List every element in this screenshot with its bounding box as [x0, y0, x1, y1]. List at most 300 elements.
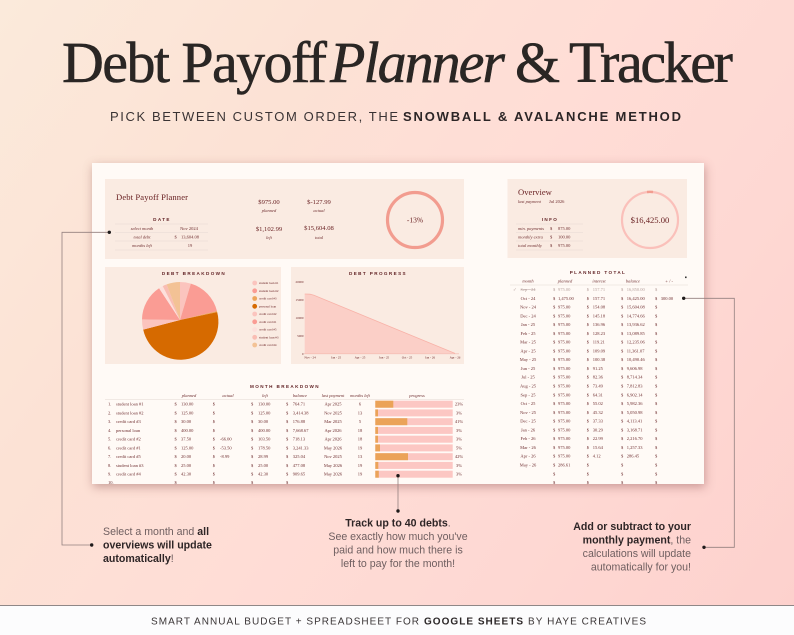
table rows: $ [655, 471, 658, 476]
table rows: 3,414.38 [293, 410, 309, 416]
stat: left [256, 226, 283, 240]
table rows [108, 402, 463, 485]
table rows: $ [587, 357, 590, 362]
table rows: Nov - 24 [520, 304, 537, 310]
table rows: 975.00 [558, 401, 571, 406]
subtitle: SNOWBALL & AVALANCHE METHOD [403, 109, 681, 124]
table rows: $ [213, 480, 216, 485]
table rows: student loan #3 [116, 463, 144, 468]
table rows: 157.71 [593, 296, 605, 301]
pie legend: student loan #2 [259, 289, 279, 293]
table rows: 19 [358, 445, 363, 450]
pie legend: personal loan [259, 304, 276, 308]
table rows: $ [655, 419, 658, 424]
table rows: 19 [358, 472, 363, 477]
table rows: $ [655, 480, 658, 485]
callout: track up to 40 debts: left to pay for the month! [341, 558, 455, 570]
table rows: $ [587, 462, 590, 468]
table rows: $ [655, 331, 658, 336]
table rows: $ [174, 402, 178, 407]
table rows: $ [174, 445, 178, 450]
table rows: 1,257.33 [627, 445, 643, 451]
table rows: 975.00 [558, 427, 571, 432]
stat: left: $1,102.99 [256, 226, 283, 233]
table rows: $ [174, 472, 178, 477]
table rows: $ [587, 331, 590, 336]
table rows: 109.09 [593, 348, 606, 353]
table rows: $ [553, 410, 556, 415]
table rows: $ [251, 480, 254, 485]
table rows: 119.21 [593, 340, 605, 345]
table rows: $ [174, 463, 178, 468]
table rows: $ [553, 471, 556, 476]
table rows: 9. [108, 472, 111, 477]
table rows: 6. [108, 445, 111, 450]
table rows: $ [655, 287, 658, 292]
table rows: 136.96 [593, 322, 606, 327]
table rows: $ [655, 454, 658, 459]
table rows: May 2026 [324, 472, 343, 477]
table rows: Oct - 25 [521, 401, 536, 406]
table rows: $ [621, 445, 624, 450]
table rows: 2. [108, 410, 111, 415]
table rows: 5,982.36 [627, 401, 643, 407]
column headers: interest [592, 278, 606, 283]
table rows: $ [174, 428, 178, 433]
table rows: $ [621, 366, 624, 371]
table rows: 9,606.98 [627, 366, 643, 372]
table rows: 5. [108, 437, 111, 442]
info table: 875.00 [558, 226, 571, 231]
table rows: $ [655, 392, 658, 397]
pie legend [252, 281, 279, 347]
table rows: 4,113.41 [627, 419, 642, 425]
date table [115, 217, 208, 250]
table rows: 130.00 [181, 402, 194, 407]
table rows: $ [174, 437, 178, 442]
table rows: 19 [358, 463, 363, 468]
table rows: $ [655, 410, 658, 415]
table rows: 7,668.67 [293, 428, 309, 434]
table rows: $ [553, 436, 556, 441]
table rows: 5,050.98 [627, 410, 643, 416]
table rows: 286.61 [558, 462, 570, 468]
pie legend: student loan #1 [259, 281, 279, 285]
area chart: 0 [302, 352, 304, 356]
table rows: 909.65 [293, 472, 306, 477]
table rows: Sep - 25 [520, 392, 536, 397]
table rows: $ [553, 419, 556, 424]
progress bars [375, 401, 453, 478]
table rows: 18 [358, 428, 363, 433]
table rows: 6,902.14 [627, 392, 643, 398]
callout: add or subtract: calculations will update [583, 548, 691, 560]
table rows: 30.00 [181, 419, 192, 424]
table rows: $ [251, 472, 254, 477]
table rows: credit card #2 [116, 437, 141, 442]
table rows: $ [655, 296, 658, 301]
table rows: $ [251, 437, 254, 442]
callout: add or subtract [573, 521, 691, 574]
callout: select a month: automatically! [103, 553, 174, 565]
table rows: $ [213, 410, 216, 415]
panel: debt payoff planner summary [105, 179, 464, 259]
area chart: Oct - 25 [402, 356, 413, 360]
date table: Nov 2024 [180, 226, 199, 231]
table rows: 400.00 [181, 428, 194, 433]
table rows: $ [213, 419, 216, 424]
table rows: $ [587, 436, 590, 441]
table rows: 718.13 [293, 437, 306, 442]
table rows: $ [655, 401, 658, 406]
table rows: $ [286, 454, 289, 459]
callout: select a month: overviews will update [103, 540, 212, 552]
table rows: 30.00 [258, 419, 269, 424]
table rows: 157.71 [593, 287, 605, 292]
progress ring: -13% [407, 216, 423, 224]
table rows: personal loan [116, 428, 141, 433]
area chart: Apr - 25 [355, 356, 366, 360]
table rows: Apr - 25 [520, 348, 536, 353]
table rows: $ [621, 322, 624, 327]
date table: 13,604.08 [181, 234, 200, 240]
date table: DATE [153, 217, 171, 222]
column headers: planned [557, 278, 573, 283]
table rows: $ [655, 427, 658, 432]
table rows: Sep - 24 [520, 287, 536, 292]
table rows: 2,216.70 [627, 436, 643, 442]
table rows: 5 [359, 419, 362, 424]
table rows: $ [251, 445, 254, 450]
table rows: $ [655, 322, 658, 327]
panel: debt breakdown [105, 267, 281, 364]
table rows: Mar - 25 [520, 340, 537, 345]
table rows: $ [286, 472, 289, 477]
table rows [513, 287, 674, 485]
table rows: 286.45 [627, 454, 640, 459]
table rows: 7. [108, 454, 111, 459]
column headers: balance [293, 393, 307, 398]
table rows: $ [213, 454, 216, 459]
table rows: 3% [456, 472, 462, 477]
table rows: 145.18 [593, 313, 606, 318]
table rows: credit card #3 [116, 419, 141, 424]
table rows: $ [286, 445, 289, 450]
stat: total: total [315, 235, 324, 240]
table rows: Apr 2026 [324, 428, 342, 433]
table rows: $ [553, 287, 556, 292]
pie legend: student loan #3 [259, 335, 279, 339]
table rows: 975.00 [558, 331, 571, 336]
table rows: Nov 2025 [324, 410, 343, 415]
table rows: $ [553, 480, 556, 485]
table rows: $ [587, 322, 590, 327]
table rows: 975.00 [558, 454, 571, 459]
table rows: 975.00 [558, 436, 571, 441]
callout: add or subtract: Add or subtract to your [573, 521, 691, 533]
table rows: 154.08 [593, 304, 606, 310]
planner heading: Debt Payoff Planner [116, 192, 188, 202]
table rows: 975.00 [558, 313, 571, 318]
table rows: 25.00 [181, 463, 192, 468]
table rows: $ [621, 454, 624, 459]
table rows: $ [621, 419, 624, 424]
callout: add or subtract: automatically for you! [591, 562, 691, 574]
area chart [296, 280, 461, 360]
table rows: 975.00 [558, 419, 571, 424]
table rows: 16,850.00 [627, 287, 645, 293]
table rows: 42% [455, 454, 463, 459]
stat: total: $15,604.08 [304, 225, 335, 232]
table rows: $ [587, 313, 590, 318]
table rows: 764.71 [293, 402, 305, 407]
table rows: 42.30 [258, 472, 269, 477]
table rows: $ [587, 366, 590, 371]
table rows: May - 26 [520, 462, 537, 468]
table rows: $ [655, 313, 658, 318]
table rows: $ [655, 445, 658, 450]
area chart: 20000 [296, 280, 304, 284]
area chart: Jan - 26 [425, 356, 435, 360]
table rows: credit card #1 [116, 445, 141, 450]
connector: progress bars to centre callout [396, 474, 400, 513]
table rows: $ [655, 348, 658, 353]
title: Planner [329, 30, 505, 95]
last payment: last payment [518, 199, 542, 204]
table rows: 30.29 [593, 427, 604, 432]
connector: select month to left callout [62, 231, 111, 547]
table rows: 975.00 [558, 340, 571, 345]
table rows: 1,475.00 [558, 296, 574, 302]
table rows: 3. [108, 419, 111, 424]
table rows: 37.50 [181, 437, 192, 442]
table rows: $ [213, 437, 216, 442]
pie legend: credit card #2 [259, 312, 277, 316]
pie legend: credit card #3 [259, 296, 277, 300]
table rows: 10,490.46 [627, 357, 645, 363]
table rows: 3,241.33 [293, 445, 309, 451]
pie legend: credit card #1 [259, 320, 277, 324]
callout: select a month: Select a month and all [103, 526, 209, 538]
table rows: 400.00 [258, 428, 271, 433]
table rows: $ [553, 331, 556, 336]
footer band [0, 605, 794, 635]
last payment: Jul 2026 [549, 199, 565, 204]
table rows: $ [553, 304, 556, 310]
callout: track up to 40 debts [328, 518, 468, 570]
table rows: $ [621, 392, 624, 397]
table rows: 15,604.08 [627, 304, 645, 310]
table rows: Aug - 25 [520, 384, 537, 388]
table rows: 20.00 [181, 454, 192, 459]
table rows: $ [174, 419, 178, 424]
month breakdown heading: MONTH BREAKDOWN [250, 384, 320, 389]
table rows: $ [553, 375, 556, 380]
table rows: $ [174, 410, 178, 415]
table rows: $ [621, 384, 624, 388]
table rows: 975.00 [558, 304, 571, 310]
table rows: $ [655, 357, 658, 362]
stat: planned: planned [261, 208, 277, 213]
footer text: GOOGLE SHEETS [424, 616, 523, 627]
table rows: 975.00 [558, 375, 571, 380]
footer text [151, 616, 646, 627]
table rows: Apr 2025 [324, 402, 342, 407]
table rows: 125.00 [258, 410, 271, 415]
date table: select month [131, 226, 154, 231]
title: Tracker [569, 30, 733, 95]
table rows: $ [286, 480, 289, 485]
table rows: Jan - 26 [521, 427, 536, 432]
table rows: 23% [455, 402, 463, 407]
table rows: 37.33 [593, 419, 604, 424]
corner marker [685, 276, 687, 278]
table rows: -8.99 [220, 454, 230, 459]
info table: INFO [542, 217, 558, 222]
table rows: 5% [456, 445, 462, 450]
table rows: $ [213, 472, 216, 477]
table rows: 13,089.85 [627, 331, 645, 337]
callout: add or subtract: monthly payment, the [583, 534, 691, 546]
table rows: $ [621, 436, 624, 441]
table rows: Nov 2025 [324, 454, 343, 459]
table rows: $ [621, 462, 624, 468]
area chart: Apr - 26 [450, 356, 461, 360]
table rows: 42.30 [181, 472, 192, 477]
table rows: 975.00 [558, 445, 571, 450]
table rows: 975.00 [558, 357, 571, 362]
table rows: 13 [358, 454, 363, 459]
table rows: 64.31 [593, 392, 603, 397]
breakdown heading: DEBT BREAKDOWN [162, 271, 226, 276]
table rows: 91.25 [593, 366, 604, 371]
table rows: 975.00 [558, 322, 571, 327]
date table: $ [174, 234, 178, 239]
table rows: $ [553, 454, 556, 459]
table rows: $ [251, 463, 254, 468]
table rows: 3% [456, 428, 462, 433]
table rows: $ [621, 427, 624, 432]
table rows: $ [655, 384, 658, 388]
table rows: 477.08 [293, 463, 306, 468]
table rows: 4. [108, 428, 111, 433]
table rows: $ [213, 445, 216, 450]
table rows: 975.00 [558, 410, 571, 415]
table rows: credit card #5 [116, 454, 141, 459]
table rows: $ [621, 348, 624, 353]
table rows: $ [553, 392, 556, 397]
title [62, 30, 733, 95]
table rows: 3% [456, 410, 462, 415]
spreadsheet card [92, 163, 704, 484]
info table [516, 217, 583, 250]
table rows: $ [621, 375, 624, 380]
table rows: 6 [359, 402, 362, 407]
stat: actual [307, 199, 332, 213]
table rows: 12,235.06 [627, 340, 645, 346]
table rows: 28.99 [258, 454, 269, 459]
table rows: $ [621, 471, 624, 476]
table rows: $ [587, 304, 590, 310]
table rows: 13 [358, 410, 363, 415]
table rows: 300.00 [661, 296, 674, 301]
table rows: $ [553, 357, 556, 362]
table rows: $ [587, 480, 590, 485]
table rows: 130.00 [258, 402, 271, 407]
info table: total monthly [518, 243, 542, 248]
table rows: 125.00 [181, 410, 194, 415]
table rows: $ [655, 436, 658, 441]
table rows: $ [587, 287, 590, 292]
table rows: $ [213, 463, 216, 468]
table rows: $ [655, 366, 658, 371]
table rows: 14,774.66 [627, 313, 645, 319]
table rows: Jun - 25 [521, 366, 536, 371]
table rows: $ [655, 304, 658, 310]
info table: 100.00 [558, 234, 571, 239]
table rows: $ [587, 471, 590, 476]
area chart: 5000 [297, 334, 304, 338]
table rows: $ [587, 410, 590, 415]
table rows: 3,168.71 [627, 427, 642, 433]
table rows: 15.64 [593, 445, 604, 450]
table rows: $ [553, 313, 556, 318]
table rows: $ [621, 340, 624, 345]
table rows: $ [587, 419, 590, 424]
table rows: Mar - 26 [520, 445, 537, 450]
table rows: 16,425.00 [627, 296, 645, 302]
table rows: $ [587, 454, 590, 459]
table rows: 45.32 [593, 410, 603, 415]
title: Debt Payoff [62, 30, 328, 95]
column headers: actual [222, 393, 234, 398]
table rows: -53.50 [220, 445, 232, 450]
area chart: Nov - 24 [304, 356, 316, 360]
stat: planned: $975.00 [258, 199, 280, 206]
table rows: 975.00 [558, 348, 571, 353]
column headers: + / - [665, 278, 674, 283]
table rows: $ [553, 348, 556, 353]
table rows: $ [655, 375, 658, 380]
table rows: 975.00 [558, 287, 571, 292]
table rows: 11,361.07 [627, 348, 645, 354]
progress heading: DEBT PROGRESS [349, 271, 407, 276]
table rows: $ [553, 384, 556, 388]
table rows: 55.02 [593, 401, 603, 406]
table rows: $ [553, 296, 556, 301]
info table: monthly extra [518, 234, 544, 239]
area chart: Jan - 25 [331, 356, 341, 360]
table rows: student loan #2 [116, 410, 144, 415]
table rows: 4.12 [593, 454, 601, 459]
table rows: $ [621, 480, 624, 485]
table rows: Apr - 26 [520, 454, 536, 459]
table rows: $ [621, 296, 624, 301]
area chart: 10000 [296, 316, 304, 320]
overview ring [622, 192, 678, 248]
table rows: 128.23 [593, 331, 606, 336]
table rows: $ [553, 401, 556, 406]
table rows: May 2026 [324, 445, 343, 450]
table rows: $ [553, 427, 556, 432]
planned total heading: PLANNED TOTAL [570, 270, 626, 275]
table rows: 22.99 [593, 436, 604, 441]
subtitle: PICK BETWEEN CUSTOM ORDER, THE [110, 109, 398, 124]
progress ring [388, 192, 442, 248]
date table: months left [132, 243, 153, 248]
table rows: $ [621, 357, 624, 362]
table rows: $ [251, 410, 254, 415]
